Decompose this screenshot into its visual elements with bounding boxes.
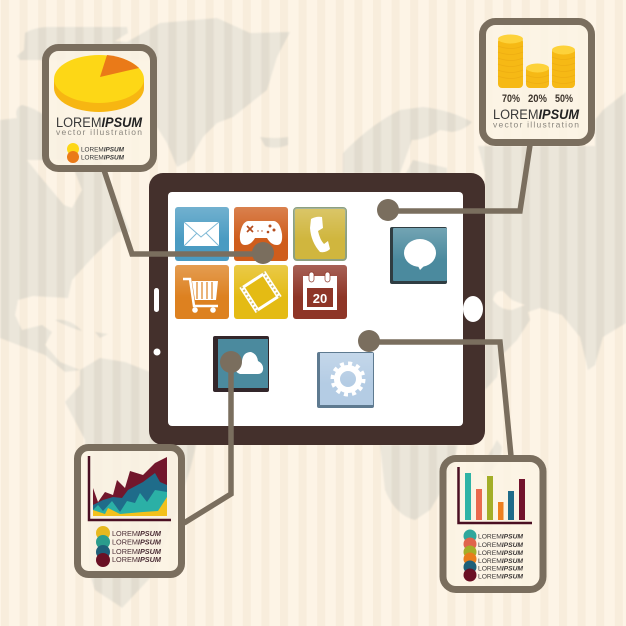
coin stack 50% [552, 46, 575, 88]
coin stack 70% [498, 34, 523, 88]
legend: LOREMIPSUM [112, 531, 161, 538]
pie chart [54, 55, 144, 112]
percent labels [502, 93, 573, 105]
legend: LOREMIPSUM [478, 566, 524, 572]
chart axes [458, 467, 532, 523]
legend: LOREMIPSUM [478, 542, 524, 549]
legend: LOREMIPSUM [478, 550, 524, 557]
percent labels: 50% [555, 93, 573, 105]
legend: LOREMIPSUM [81, 154, 125, 162]
panel: area chart [78, 448, 182, 574]
coin stack 20% [526, 64, 549, 88]
app icon: speech bubble [390, 227, 447, 284]
panel: pie chart [46, 48, 154, 168]
app icon: phone [294, 208, 346, 260]
legend: LOREMIPSUM [478, 558, 524, 565]
tablet camera [154, 348, 160, 356]
app icon: mail [175, 207, 229, 261]
legend: LOREMIPSUM [112, 549, 161, 556]
panel: coins [482, 22, 592, 142]
app icon: calendar: 20 [313, 291, 327, 306]
legend: LOREMIPSUM [81, 146, 125, 154]
legend [67, 143, 125, 163]
app icon: cloud [213, 336, 269, 392]
percent labels: 70% [502, 93, 520, 105]
connector: pie panel to game icon [104, 170, 274, 264]
heading: LOREMIPSUM [493, 107, 580, 122]
connector: coins panel to screen [377, 145, 530, 221]
chart axes [89, 456, 171, 520]
app icon: shopping cart [175, 265, 229, 319]
tablet home button [463, 296, 483, 322]
app icon: gear [317, 352, 374, 408]
tablet [149, 173, 485, 445]
app icon: film strip [234, 265, 288, 319]
legend: LOREMIPSUM [478, 534, 524, 540]
legend [96, 526, 161, 567]
legend: LOREMIPSUM [478, 574, 524, 580]
heading: LOREMIPSUM [56, 115, 143, 130]
connector: area chart panel to cloud icon [184, 351, 242, 523]
percent labels: 20% [528, 93, 547, 105]
tablet speaker [154, 288, 159, 312]
app icon: game controller [234, 207, 288, 261]
bar chart [465, 473, 525, 520]
panel: bar chart [443, 458, 543, 590]
subheading: vector illustration [493, 120, 579, 130]
legend: LOREMIPSUM [112, 557, 161, 564]
legend: LOREMIPSUM [112, 540, 161, 546]
legend [464, 530, 524, 582]
connector: bar chart panel to screen [358, 330, 511, 456]
subheading: vector illustration [56, 127, 142, 137]
app icon: calendar [293, 265, 347, 319]
area chart [93, 457, 167, 516]
